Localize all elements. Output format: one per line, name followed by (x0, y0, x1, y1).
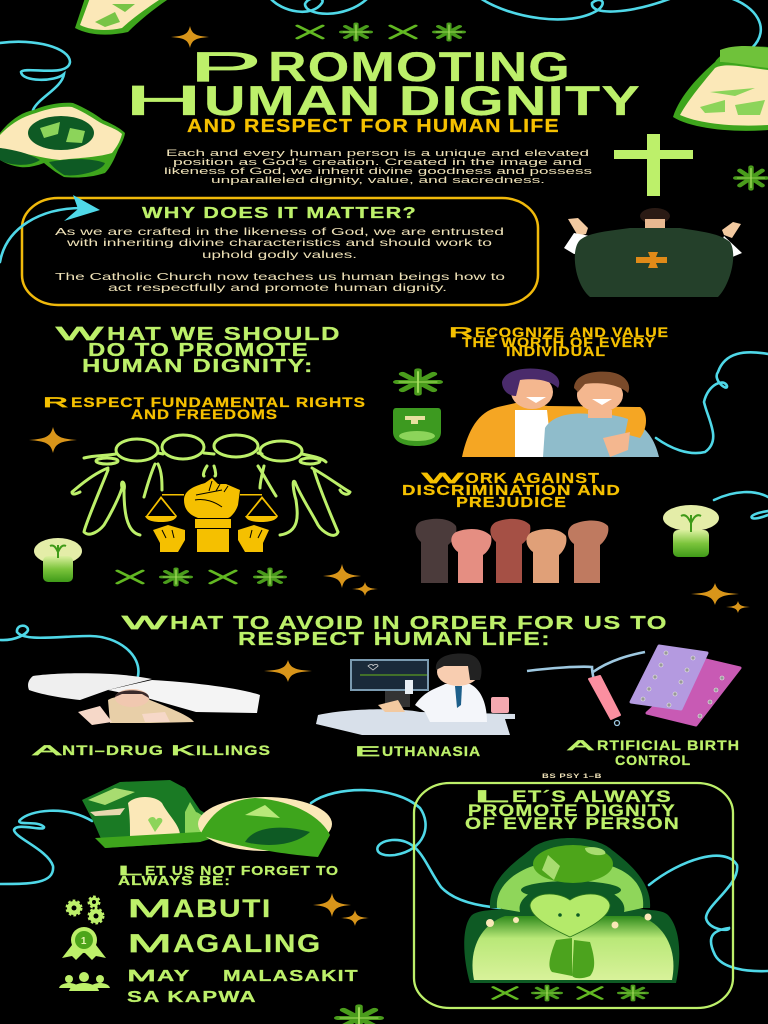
heading: work against discrimination: W (422, 471, 464, 487)
label: anti-drug killings: NTI–DRUG (62, 743, 164, 758)
label: artificial birth control: A (568, 738, 593, 753)
label: artificial birth control (568, 738, 740, 768)
label: anti-drug killings: A (33, 743, 61, 758)
text: may malasakit sa kapwa: SA KAPWA (127, 989, 257, 1006)
panel text: with inheriting divine characteristics and should work to (65, 238, 492, 249)
arrow: cyan into panel (0, 195, 100, 262)
text: magaling: M (127, 930, 172, 958)
text: mabuti (127, 895, 272, 923)
justice fist (145, 478, 278, 552)
decoration: top x and asterisk row (297, 24, 463, 40)
label: euthanasia (355, 744, 481, 759)
illustration: two friends (462, 368, 659, 457)
label: euthanasia: UTHANASIA (382, 744, 481, 759)
heading: what we should do: DO TO PROMOTE (88, 339, 309, 360)
heading: work against discrimination: PREJUDICE (456, 495, 567, 511)
icon: gears (67, 897, 103, 923)
intro paragraph (164, 148, 593, 185)
sticker: top left leaf (75, 0, 170, 35)
icon: cross (614, 134, 693, 196)
badge: plant left (34, 538, 82, 582)
decoration: gold star (29, 427, 77, 453)
panel heading (465, 787, 680, 833)
panel heading: L (474, 787, 509, 806)
intro paragraph: unparalleled dignity, value, and sacredness. (211, 175, 545, 185)
label: euthanasia: E (355, 744, 380, 759)
heading: let us not forget (118, 863, 339, 888)
heading: respect fundamental rights: R (43, 395, 69, 410)
panel text: The Catholic Church now teaches us human beings how to (55, 272, 505, 283)
icon: ribbon: 1 (81, 936, 87, 947)
text: magaling (127, 930, 322, 958)
label: anti-drug killings: ILLINGS (196, 743, 271, 758)
decoration: asterisk (397, 370, 439, 394)
heading: respect fundamental rights: AND FREEDOMS (131, 407, 278, 422)
decoration: x and asterisk row (493, 986, 647, 1000)
text: may malasakit sa kapwa (127, 968, 359, 1006)
sticker: top right blob (673, 46, 768, 131)
illustration: doctor and patient (316, 654, 515, 735)
illustration: heart figure holding globe (464, 838, 679, 983)
heading: let us not forget: ET US NOT FORGET TO (145, 863, 339, 878)
heading: work against discrimination: DISCRIMINATION AND (402, 483, 621, 499)
decoration: gold star (171, 26, 209, 48)
heading: let us not forget: L (118, 863, 142, 878)
heading: work against discrimination: ORK AGAINST (465, 471, 600, 487)
heading: recognize and value: R (449, 325, 474, 340)
heading: let us not forget: ALWAYS BE: (118, 873, 231, 888)
decoration: gold star (264, 660, 312, 682)
panel heading: OF EVERY PERSON (465, 814, 680, 833)
subtitle: AND RESPECT FOR HUMAN LIFE (187, 115, 560, 136)
credit: BS PSY 1–B (542, 774, 602, 780)
text: may malasakit sa kapwa: AY (157, 968, 191, 985)
panel: why does it matter (22, 198, 538, 305)
decoration: gold stars right (691, 583, 750, 613)
sticker: whale (198, 797, 332, 857)
panel: let's always promote dignity (414, 783, 733, 1008)
panel text: uphold godly values. (202, 250, 357, 261)
text: may malasakit sa kapwa: M (127, 968, 156, 985)
heading: respect fundamental rights (43, 395, 366, 422)
label: anti-drug killings: K (171, 743, 194, 758)
title: P (189, 43, 262, 90)
heading: what to avoid: W (122, 612, 168, 633)
icon: people group (59, 972, 110, 991)
panel text: As we are crafted in the likeness of God, we are entrusted (55, 227, 504, 238)
heading: recognize and value: INDIVIDUAL (506, 344, 606, 359)
label: artificial birth control: CONTROL (615, 753, 691, 768)
illustration: priest (564, 208, 742, 297)
intro paragraph: likeness of God, we inherit divine goodness and possess (164, 166, 593, 176)
icon: ribbon (62, 927, 106, 960)
intro paragraph: position as God's creation. Created in the image and (173, 157, 582, 167)
heading: what we should do (56, 323, 341, 376)
heading: respect fundamental rights: ESPECT FUNDAMENTAL RIGHTS (71, 395, 366, 410)
title: ROMOTING (268, 43, 571, 90)
heading: recognize and value: THE WORTH OF EVERY (462, 335, 656, 350)
label: artificial birth control: RTIFICIAL BIRTH (597, 738, 740, 753)
heading: recognize and value (449, 325, 669, 359)
illustration: linked people and justice fist (72, 435, 350, 552)
heading: recognize and value: ECOGNIZE AND VALUE (475, 325, 669, 340)
panel heading: PROMOTE DIGNITY (468, 801, 676, 820)
title: UMAN DIGNITY (204, 77, 641, 124)
heading: what to avoid: HAT TO AVOID IN ORDER FOR US TO (170, 612, 668, 633)
illustration: contraceptives (527, 646, 740, 726)
title (124, 43, 641, 124)
panel text: act respectfully and promote human dignity. (108, 283, 447, 294)
decoration: bottom asterisk (338, 1006, 380, 1024)
badge: faucet (393, 408, 441, 446)
sticker: hands with globe (0, 103, 125, 178)
heading: what to avoid: RESPECT HUMAN LIFE: (238, 628, 551, 649)
badge: plant right (663, 505, 719, 557)
decoration: x and asterisk row (117, 569, 284, 585)
text: mabuti: M (127, 895, 172, 923)
heading: why does it matter: WHY DOES IT MATTER? (142, 205, 417, 222)
label: anti-drug killings (33, 743, 271, 758)
title: H (124, 77, 203, 124)
intro paragraph: Each and every human person is a unique and elevated (166, 148, 589, 158)
heading: work against discrimination (402, 471, 621, 511)
decoration: gold stars (323, 564, 378, 596)
illustration: raised fists (416, 519, 608, 583)
text: mabuti: ABUTI (173, 895, 272, 923)
text: magaling: AGALING (173, 930, 322, 958)
heading: what we should do: HAT WE SHOULD (107, 323, 341, 344)
heading: what we should do: W (56, 323, 104, 344)
panel text (55, 227, 505, 294)
text: may malasakit sa kapwa: MALASAKIT (223, 968, 359, 985)
people outlines (72, 435, 350, 535)
decoration: gold stars (313, 893, 369, 926)
heading: what we should do: HUMAN DIGNITY: (82, 355, 314, 376)
illustration: pill crushing man (28, 673, 260, 725)
sticker: forest animals (82, 780, 235, 848)
panel heading: ET´S ALWAYS (512, 787, 672, 806)
heading: what to avoid (122, 612, 668, 649)
decoration: right asterisk (736, 167, 766, 189)
